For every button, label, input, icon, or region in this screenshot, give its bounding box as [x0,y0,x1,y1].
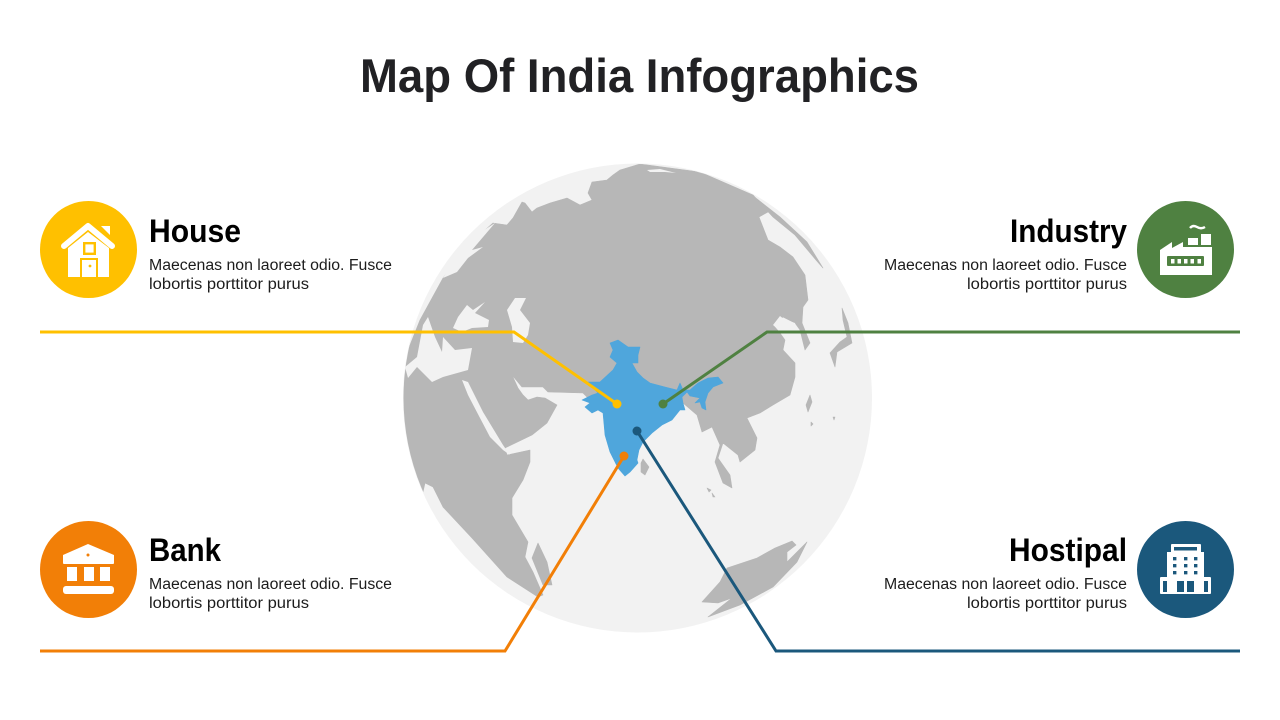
japan [830,308,852,367]
connector: hospital [632,426,1240,651]
panel: hospital text: lobortis porttitor purus [967,595,1127,612]
globe map [395,164,872,632]
panel: industry text: Maecenas non laoreet odio. Fusce [884,257,1127,274]
icon: factory [1137,201,1234,298]
connector: house [40,332,622,408]
panel: house text: House [149,213,241,249]
panel: house text: Maecenas non laoreet odio. Fusce [149,257,392,274]
panel: bank text: Maecenas non laoreet odio. Fusce [149,576,392,593]
panel: bank text [149,532,392,612]
india map [582,340,723,476]
connector: bank [40,452,628,651]
panel: house text: lobortis porttitor purus [149,276,309,293]
panel: hospital text: Hostipal [1009,532,1127,568]
taiwan [806,395,812,412]
white sea inlet [443,223,495,278]
panel: industry text: lobortis porttitor purus [967,276,1127,293]
yellow sea notch [773,316,796,335]
connector: industry [658,332,1240,408]
madagascar [532,543,552,585]
icon: hospital building [1137,521,1234,618]
panel: bank text: Bank [149,532,221,568]
sri lanka [641,459,649,475]
panel: house text [149,213,392,293]
mediterranean [405,317,472,382]
southern landmass [702,541,807,617]
panel: hospital text: Maecenas non laoreet odio. Fusce [884,576,1127,593]
panel: hospital text [884,532,1127,612]
title: Map Of India Infographics [360,49,919,102]
arctic inlet [647,169,676,173]
panel: industry text: Industry [1010,213,1127,249]
icon: bank [40,521,137,618]
red sea [462,380,510,455]
icon: house [40,201,137,298]
panel: industry text [884,213,1127,293]
small islands [707,417,835,497]
kamchatka [752,195,823,268]
caspian sea [507,298,530,343]
panel: bank text: lobortis porttitor purus [149,595,309,612]
black sea [453,302,489,332]
